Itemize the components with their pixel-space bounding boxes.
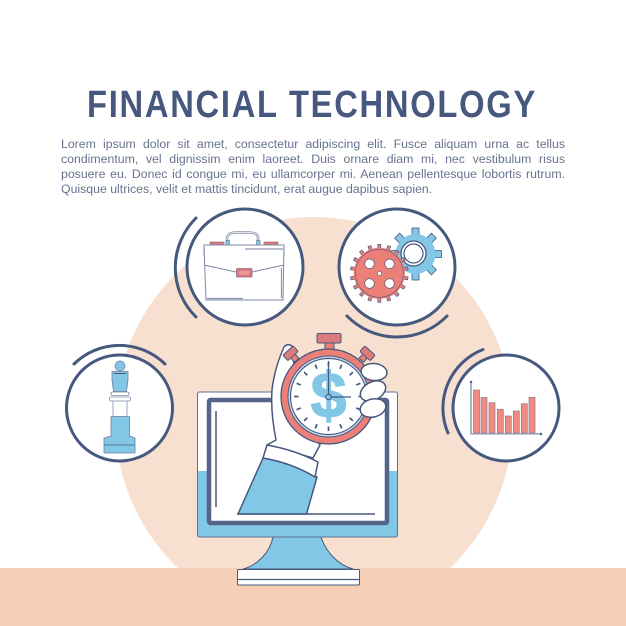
fingers [357, 362, 389, 420]
hand back [267, 345, 320, 458]
icon: red gear [350, 244, 408, 302]
hand holding stopwatch [238, 334, 389, 514]
left side button [283, 346, 302, 365]
icon: blue gear [390, 228, 442, 280]
right side button [356, 346, 375, 365]
monitor bezel and screen [209, 400, 387, 523]
clock hands [328, 361, 351, 397]
icon: gears in circle [339, 209, 455, 337]
icon: briefcase in circle [175, 209, 303, 325]
icon: bar chart in circle [443, 350, 559, 461]
title: FINANCIAL TECHNOLOGY [87, 84, 537, 126]
icon: chess piece in circle [66, 345, 172, 461]
sleeve [238, 458, 317, 514]
text block: lorem ipsum paragraph: posuere eu. Donec id congue mi, eu ullamcorper mi. Aenean pellentesque lobortis rutrum. [61, 166, 565, 180]
monitor [198, 392, 398, 585]
stopwatch [281, 334, 376, 444]
dollar sign: $ [311, 359, 346, 431]
text block: lorem ipsum paragraph: Lorem ipsum dolor sit amet, consectetur adipiscing elit. Fusce aliquam urna ac tellus [61, 136, 565, 150]
background peach circle [115, 217, 513, 623]
floor band [0, 568, 626, 626]
clock ticks [294, 362, 363, 431]
text block: lorem ipsum paragraph: Quisque ultrices, velit et mattis tincidunt, erat augue dapibus sapien. [61, 182, 432, 196]
monitor stand [243, 537, 353, 569]
monitor base [238, 570, 360, 585]
monitor body [198, 392, 398, 537]
cuff [263, 445, 318, 477]
text block: lorem ipsum paragraph: condimentum, vel dignissim enim laoreet. Duis ornare diam mi, nec vestibulum risus [61, 152, 565, 166]
text block: lorem ipsum paragraph [61, 136, 565, 196]
